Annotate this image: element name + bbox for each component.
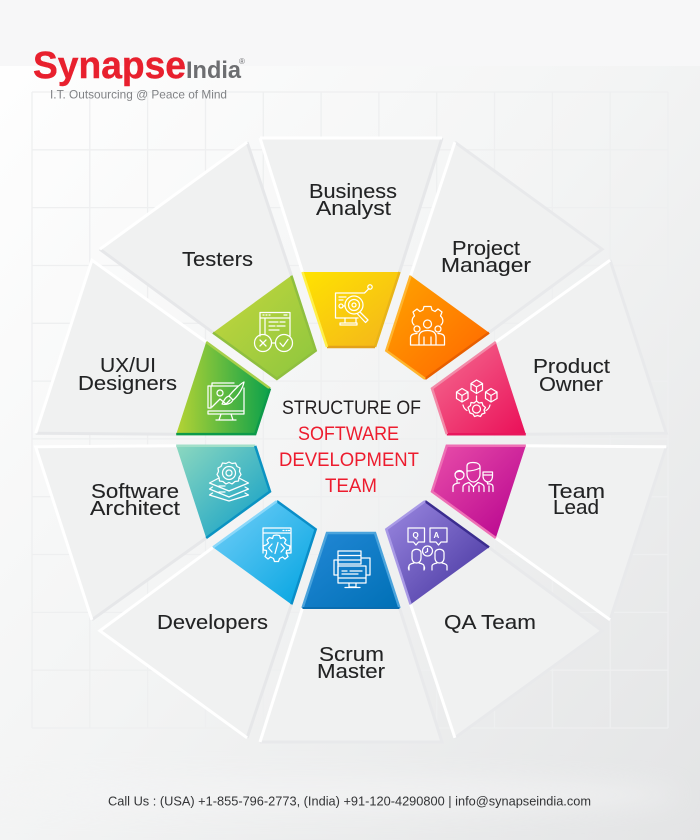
panel: UX/UI Designers (36, 260, 270, 434)
label: Product Owner: Owner (539, 374, 603, 396)
logo: I.T. Outsourcing @ Peace of Mind (50, 88, 227, 102)
panel: Project Manager (386, 142, 602, 379)
icon: question and answer people: Q (412, 531, 419, 540)
panel: Testers (100, 142, 316, 379)
label: Team Lead (548, 481, 605, 519)
center title: SOFTWARE (298, 423, 399, 445)
label: Business Analyst: Business (309, 181, 397, 203)
label: UX/UI Designers (78, 355, 177, 395)
center title: STRUCTURE OF (282, 397, 421, 419)
panel: Software Architect (36, 446, 270, 620)
icon: question and answer people (408, 528, 447, 570)
panel: Team Lead (432, 446, 666, 620)
panel: Developers (100, 501, 316, 738)
label: Scrum Master: Scrum (319, 644, 384, 666)
icon: servers and monitor (334, 551, 370, 588)
label: Software Architect: Software (91, 481, 179, 503)
center title: DEVELOPMENT (279, 449, 419, 471)
label: Project Manager: Project (452, 238, 520, 260)
icon: monitor with target and magnifier (336, 285, 372, 325)
label: Project Manager (441, 238, 531, 277)
center title: TEAM (325, 475, 377, 497)
label: Developers: Developers (157, 612, 268, 634)
icon: monitor with paint brush (208, 382, 244, 420)
icon: gear over layers (210, 462, 248, 501)
center title (279, 397, 421, 497)
label: Testers: Testers (182, 249, 253, 271)
label: Software Architect: Architect (90, 498, 181, 520)
icon: gear with team (410, 306, 444, 345)
label: Business Analyst: Analyst (316, 198, 391, 220)
logo (33, 45, 245, 102)
icon: code window with gear (263, 528, 291, 562)
label: Scrum Master: Master (317, 661, 385, 683)
label: Product Owner (533, 356, 610, 396)
icon: code window with cross and check (254, 312, 292, 352)
panel: QA Team (386, 501, 602, 738)
panel: Scrum Master (260, 533, 442, 742)
label: Team Lead: Team (548, 481, 605, 503)
label: UX/UI Designers: UX/UI (100, 355, 156, 377)
label: UX/UI Designers: Designers (78, 373, 177, 395)
label: Product Owner: Product (533, 356, 610, 378)
label: Scrum Master (317, 644, 385, 683)
icon: cubes and gear (456, 380, 497, 416)
footer contact line: Call Us : (USA) +1-855-796-2773, (India) +91-120-4290800 | info@synapseindia.com (108, 794, 591, 808)
logo: ® (239, 57, 245, 66)
icon: question and answer people: A (434, 531, 440, 540)
label: Team Lead: Lead (553, 497, 599, 519)
label: Business Analyst (309, 181, 397, 220)
label: Software Architect (90, 481, 181, 520)
logo: India (186, 57, 241, 84)
logo: Synapse (33, 45, 186, 87)
icon: team of three (453, 462, 493, 492)
label: Project Manager: Manager (441, 255, 531, 277)
panel: Product Owner (432, 260, 666, 434)
panel: Business Analyst (260, 138, 442, 347)
label: QA Team: QA Team (444, 612, 536, 634)
